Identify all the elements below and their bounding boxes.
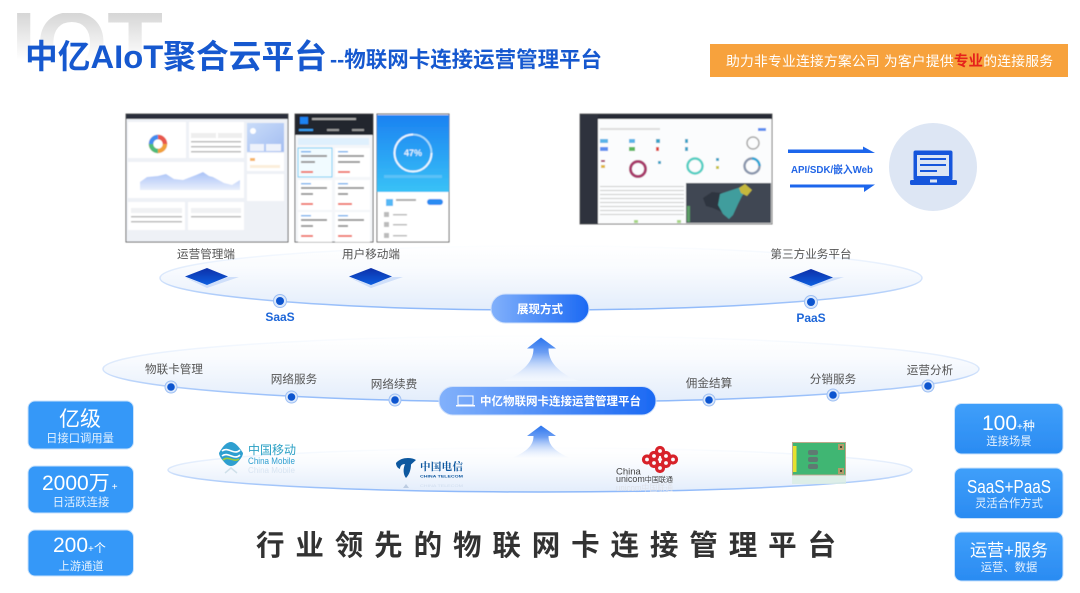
panel: mobile package screenshot xyxy=(295,114,373,242)
panel: mobile usage screenshot xyxy=(377,114,449,242)
stat: cooperation modes xyxy=(954,468,1063,518)
stat: billion calls xyxy=(28,401,134,449)
stat: operations and services: 运营、数据 xyxy=(981,560,1037,574)
logo: China Unicom: China xyxy=(616,466,642,478)
callout: orange banner xyxy=(710,44,1068,77)
icon: diamond mobile xyxy=(348,268,403,288)
stat: connection scenarios: 连接场景 xyxy=(986,434,1032,448)
logo: China Unicom: unicom中国联通 xyxy=(616,482,673,493)
stat: operations and services xyxy=(954,532,1063,581)
panel: ellipse presentation layer xyxy=(160,246,922,310)
stat: connection scenarios xyxy=(954,404,1063,454)
pill: display mode: 展现方式 xyxy=(517,302,563,316)
arrow: lower API arrow xyxy=(790,184,875,192)
stat: daily active connections: 日活跃连接 xyxy=(53,495,109,509)
stat: operations and services: 运营+服务 xyxy=(970,541,1048,560)
panel: third-party platform screenshot xyxy=(580,114,772,224)
panel: ellipse platform layer xyxy=(103,336,979,402)
node: PaaS: PaaS xyxy=(796,311,826,325)
label: third-party platform: 第三方业务平台 xyxy=(770,247,852,261)
panel: ellipse carrier layer xyxy=(168,448,912,492)
logo: China Telecom: CHINA TELECOM xyxy=(420,483,463,488)
arrow: upper flow arrow xyxy=(503,338,578,381)
logo: China Telecom xyxy=(396,458,464,488)
node: SaaS xyxy=(265,294,295,324)
panel: operations dashboard screenshot xyxy=(126,114,288,242)
label: mobile end: 用户移动端 xyxy=(342,247,400,261)
item: network renewal xyxy=(371,377,417,406)
item: network service xyxy=(271,372,318,403)
item: SIM management: 物联卡管理 xyxy=(145,362,203,376)
stat: upstream channels xyxy=(28,530,134,576)
icon: diamond operations xyxy=(184,268,239,288)
item: network renewal: 网络续费 xyxy=(371,377,417,391)
title: --物联网卡连接运营管理平台 xyxy=(330,47,602,72)
item: operations analysis xyxy=(907,363,954,392)
stat: billion calls: 日接口调用量 xyxy=(46,432,114,445)
stat: upstream channels: 200+个 xyxy=(53,534,106,557)
heading: industry-leading platform: 行业领先的物联网卡连接管理平台 xyxy=(256,529,836,562)
title: 中亿AIoT聚合云平台 xyxy=(25,38,327,75)
label: operations end: 运营管理端 xyxy=(177,247,235,261)
node: PaaS xyxy=(796,296,826,325)
title xyxy=(25,38,602,75)
pill: connectivity platform xyxy=(439,386,656,415)
stat: daily active connections: 2000万+ xyxy=(42,472,118,495)
node: SaaS: SaaS xyxy=(265,310,295,324)
item: distribution service: 分销服务 xyxy=(810,372,857,386)
panel: mobile usage screenshot: 47% xyxy=(404,148,422,158)
item: distribution service xyxy=(810,372,857,401)
icon: diamond third-party xyxy=(788,269,844,288)
item: commission settlement xyxy=(686,376,732,406)
logo: China Unicom: unicom中国联通 xyxy=(616,474,673,485)
arrow: upper API arrow xyxy=(788,146,875,153)
callout: orange banner: 助力非专业连接方案公司 为客户提供专业的连接服务 xyxy=(726,52,1053,70)
logo: China Unicom xyxy=(616,448,676,493)
stat: daily active connections xyxy=(28,466,134,513)
stat: cooperation modes: 灵活合作方式 xyxy=(975,496,1043,510)
stat: billion calls: 亿级 xyxy=(59,408,101,431)
pill: display mode xyxy=(491,294,589,323)
icon: laptop in circle xyxy=(889,123,977,211)
logo: China Mobile xyxy=(219,442,296,475)
arrow: lower flow arrow xyxy=(510,426,572,459)
logo: China Telecom: CHINA TELECOM xyxy=(420,474,464,478)
item: network service: 网络服务 xyxy=(271,372,318,386)
logo: China Mobile: 中国移动 xyxy=(248,442,296,457)
stat: upstream channels: 上游通道 xyxy=(58,559,104,573)
stat: connection scenarios: 100+种 xyxy=(982,412,1035,435)
logo: China Telecom: 中国电信 xyxy=(420,460,464,473)
icon: IoT SIM module xyxy=(792,442,846,484)
logo: China Mobile: China Mobile xyxy=(248,466,296,475)
item: operations analysis: 运营分析 xyxy=(907,363,954,377)
item: commission settlement: 佣金结算 xyxy=(686,376,732,390)
item: SIM management xyxy=(145,362,203,393)
stat: cooperation modes: SaaS+PaaS xyxy=(967,477,1051,497)
pill: connectivity platform: 中亿物联网卡连接运营管理平台 xyxy=(480,394,641,408)
logo: China Mobile: China Mobile xyxy=(248,456,295,467)
arrow label: API/SDK: API/SDK/嵌入Web xyxy=(791,164,873,176)
